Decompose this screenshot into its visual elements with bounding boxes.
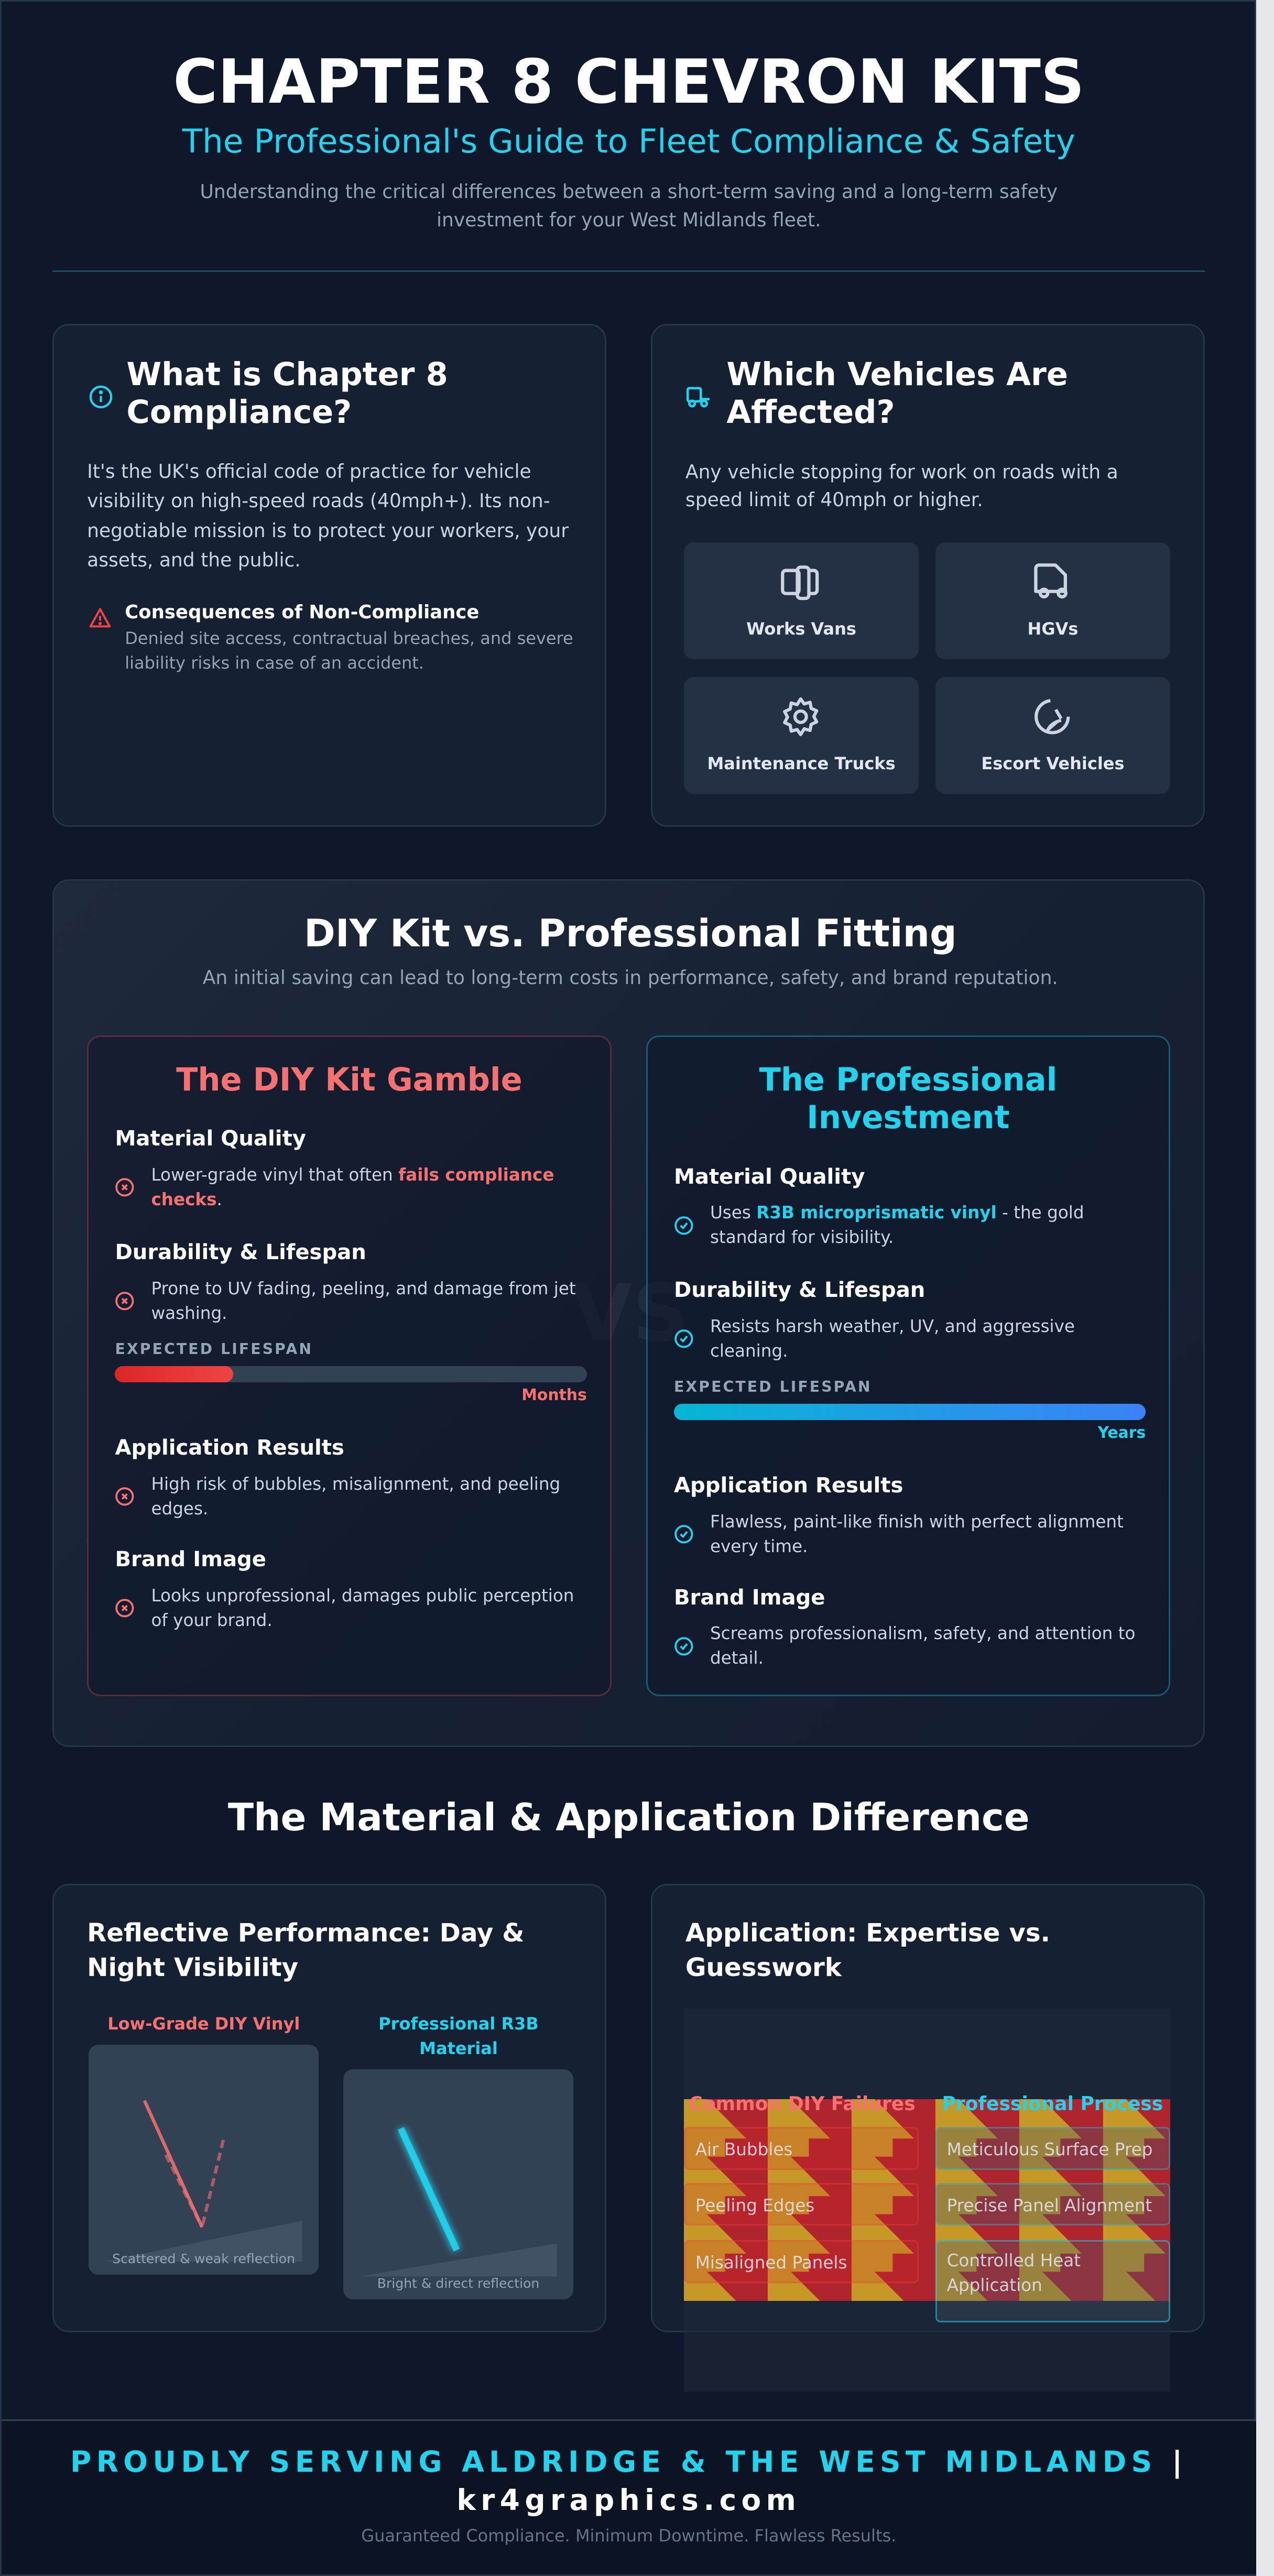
- consequences: [125, 602, 573, 673]
- icon: truck: [687, 387, 710, 408]
- item: material quality: [674, 1165, 1084, 1247]
- tile: works vans: [684, 542, 919, 659]
- item: application results: Application Results: [674, 1473, 903, 1498]
- item: material quality: Uses R3B microprismatic vinyl - the gold standard for visibility.: [710, 1203, 1084, 1247]
- intro text: Understanding the critical differences between a short-term saving and a long-term safety investment for your West Midlands fleet.: [200, 181, 1058, 231]
- label: low-grade: Low-Grade DIY Vinyl: [107, 2014, 300, 2034]
- heading: Which Vehicles Are: [726, 356, 1068, 393]
- column: DIY failures: [684, 2093, 919, 2283]
- lifespan bar: years: Years: [1098, 1424, 1146, 1442]
- heading: Reflective Performance: Day &: [87, 1918, 524, 1948]
- heading: Application: Expertise vs.: [685, 1918, 1050, 1948]
- section heading: The Material & Application Difference: [228, 1796, 1030, 1840]
- item: durability: [674, 1278, 1075, 1361]
- lifespan bar: months: EXPECTED LIFESPAN: [115, 1340, 313, 1358]
- label: professional R3B: Professional R3B: [378, 2014, 539, 2034]
- consequences: Consequences of Non-Compliance: [125, 602, 479, 623]
- item: application results: [674, 1473, 1124, 1556]
- label: professional R3B: [378, 2014, 539, 2058]
- item: brand image: Looks unprofessional, damages public perception of your brand.: [151, 1586, 574, 1630]
- chevron pattern band: [684, 2099, 1170, 2301]
- card: DIY kit gamble: [87, 1035, 612, 1696]
- item: material quality: Material Quality: [674, 1165, 865, 1189]
- item: durability: [115, 1240, 576, 1323]
- item: application results: [115, 1436, 560, 1519]
- footer: PROUDLY SERVING ALDRIDGE & THE WEST MIDLANDS |: [70, 2445, 1188, 2479]
- paragraph: It's the UK's official code of practice for vehicle visibility on high-speed roads (40mph+). Its non-negotiable mission is to protect your workers, your assets, and the public.: [87, 461, 569, 571]
- diagram: direct reflection: Bright & direct reflection: [377, 2276, 540, 2291]
- panel: vehicles affected: [651, 324, 1205, 827]
- card heading: Investment: [807, 1099, 1010, 1136]
- lifespan bar: months: Months: [521, 1386, 587, 1404]
- diagram: scattered reflection: [89, 2045, 319, 2275]
- heading: [87, 1918, 524, 1982]
- item: application results: High risk of bubbles, misalignment, and peeling edges.: [151, 1474, 560, 1519]
- column: professional process: Professional Process: [942, 2093, 1163, 2115]
- panel: reflective performance: [52, 1884, 606, 2332]
- heading: DIY Kit vs. Professional Fitting: [304, 912, 957, 956]
- item: durability: Prone to UV fading, peeling, and damage from jet washing.: [151, 1279, 576, 1323]
- label: professional R3B: Material: [419, 2038, 498, 2058]
- panel: application expertise: [651, 1884, 1205, 2332]
- item: brand image: [674, 1586, 1135, 1668]
- application comparison area: [684, 2009, 1170, 2392]
- heading: Compliance?: [126, 394, 352, 431]
- heading: What is Chapter 8: [126, 356, 448, 393]
- item: material quality: Material Quality: [115, 1127, 306, 1151]
- lifespan bar: months: [115, 1340, 587, 1404]
- card heading: The Professional: [759, 1062, 1057, 1098]
- item: application results: Flawless, paint-like finish with perfect alignment every time.: [710, 1512, 1124, 1556]
- panel: DIY vs professional: [52, 879, 1205, 1747]
- subtitle: The Professional's Guide to Fleet Compliance & Safety: [182, 122, 1075, 160]
- column: professional process: [935, 2093, 1170, 2322]
- consequences: Denied site access, contractual breaches, and severe liability risks in case of an accident.: [125, 628, 573, 673]
- card: professional investment: [646, 1035, 1170, 1696]
- heading: Guesswork: [685, 1953, 842, 1982]
- lifespan bar: years: [674, 1378, 1146, 1442]
- tile: maintenance trucks: [684, 677, 919, 794]
- column: DIY failures: Misaligned Panels: [695, 2253, 847, 2273]
- vs watermark: VS: [571, 1267, 689, 1359]
- item: brand image: Brand Image: [674, 1586, 825, 1610]
- item: application results: Application Results: [115, 1436, 344, 1460]
- diagram: direct reflection: [343, 2069, 573, 2299]
- tile: escort vehicles: Escort Vehicles: [981, 754, 1125, 773]
- column: DIY failures: Air Bubbles: [695, 2140, 792, 2159]
- diagram: scattered reflection: Scattered & weak reflection: [112, 2251, 295, 2266]
- tile: escort vehicles: [935, 677, 1170, 794]
- card heading: The DIY Kit Gamble: [176, 1062, 522, 1098]
- tile: HGVs: [935, 542, 1170, 659]
- column: DIY failures: Peeling Edges: [695, 2196, 814, 2215]
- column: professional process: Precise Panel Alignment: [947, 2196, 1152, 2215]
- item: durability: Resists harsh weather, UV, and aggressive cleaning.: [710, 1316, 1075, 1361]
- item: material quality: Lower-grade vinyl that often fails compliance checks.: [151, 1165, 554, 1209]
- title: CHAPTER 8 CHEVRON KITS: [173, 47, 1084, 117]
- heading: Night Visibility: [87, 1953, 298, 1982]
- item: brand image: Brand Image: [115, 1547, 266, 1571]
- item: durability: Durability & Lifespan: [674, 1278, 925, 1302]
- heading: [126, 356, 448, 431]
- column: professional process: Meticulous Surface Prep: [947, 2140, 1152, 2159]
- tile: works vans: Works Vans: [746, 619, 856, 639]
- column: DIY failures: Common DIY Failures: [689, 2093, 916, 2115]
- heading: [726, 356, 1068, 431]
- item: material quality: [115, 1127, 554, 1209]
- panel: what is chapter 8: [52, 324, 606, 827]
- tile: HGVs: HGVs: [1028, 619, 1078, 639]
- icon: warning: [89, 608, 111, 628]
- footer: Guaranteed Compliance. Minimum Downtime. Flawless Results.: [361, 2526, 896, 2546]
- column: professional process: Controlled Heat: [947, 2251, 1081, 2271]
- column: professional process: Application: [947, 2275, 1042, 2295]
- item: brand image: Screams professionalism, safety, and attention to detail.: [710, 1623, 1135, 1668]
- footer: kr4graphics.com: [456, 2483, 801, 2517]
- item: brand image: [115, 1547, 574, 1630]
- heading: Affected?: [726, 394, 895, 431]
- text: Any vehicle stopping for work on roads with a speed limit of 40mph or higher.: [685, 461, 1118, 511]
- footer: [2, 2421, 1256, 2574]
- item: durability: Durability & Lifespan: [115, 1240, 366, 1264]
- heading: [685, 1918, 1050, 1982]
- card heading: [759, 1062, 1057, 1136]
- lifespan bar: years: EXPECTED LIFESPAN: [674, 1378, 872, 1395]
- icon: info: [89, 386, 112, 409]
- tile: maintenance trucks: Maintenance Trucks: [707, 754, 896, 773]
- subheading: An initial saving can lead to long-term costs in performance, safety, and brand reputation.: [203, 967, 1058, 989]
